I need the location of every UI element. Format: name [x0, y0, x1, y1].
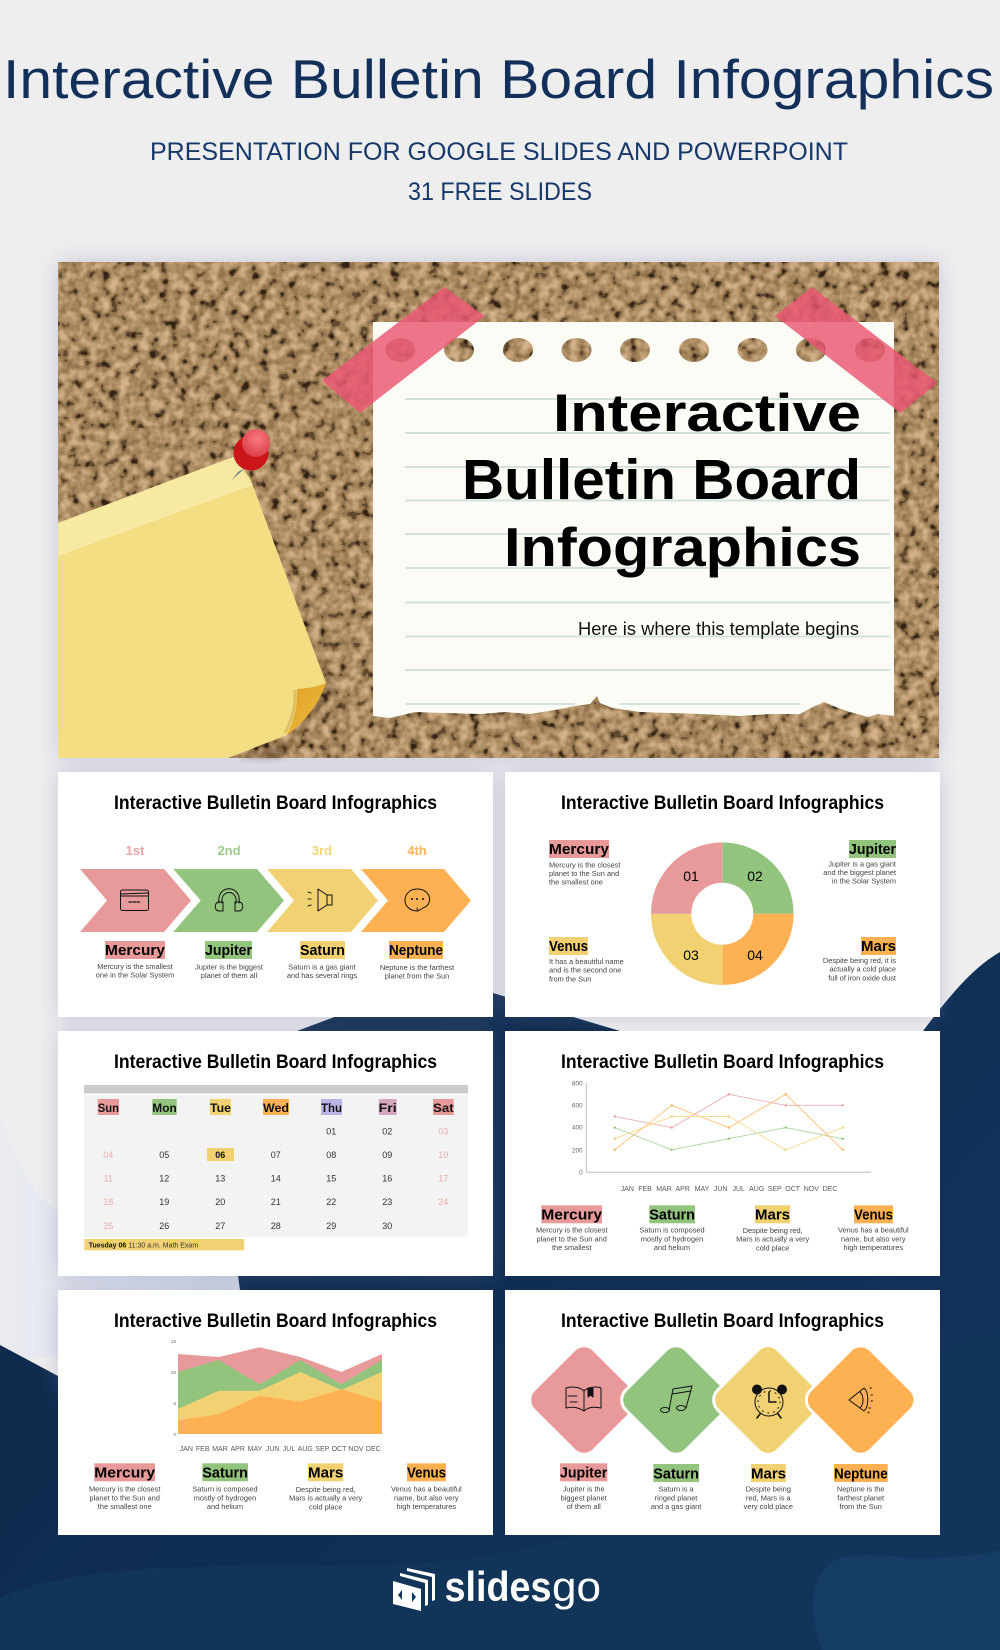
- donut chart: [651, 842, 794, 985]
- month labels: MAY: [248, 1446, 263, 1453]
- descriptions: of them all: [567, 1502, 601, 1511]
- month labels: SEP: [768, 1186, 782, 1193]
- y axis labels: 10: [171, 1370, 176, 1375]
- descriptions: and a gas giant: [651, 1502, 701, 1511]
- background: navy wave: [0, 952, 1000, 1650]
- panel: area chart slide: [58, 1290, 493, 1535]
- label: Jupiter: Jupiter: [205, 942, 252, 959]
- calendar: [84, 1095, 468, 1237]
- panel: rounded diamonds slide: [505, 1290, 940, 1535]
- descriptions: and has several rings: [287, 971, 357, 980]
- logo: slidesgo: [393, 1563, 601, 1611]
- descriptions: red, Mars is a: [746, 1493, 792, 1502]
- subtitle line 1: PRESENTATION FOR GOOGLE SLIDES AND POWERPOINT: [150, 138, 848, 166]
- descriptions: ringed planet: [655, 1493, 697, 1502]
- text: Mars: actually a cold place: [829, 965, 896, 974]
- label: Neptune: Neptune: [834, 1465, 888, 1482]
- dates: 17: [438, 1174, 448, 1184]
- ordinal labels: 1st: [126, 843, 145, 858]
- dates: 21: [271, 1197, 281, 1207]
- text: Venus: [549, 957, 624, 983]
- label: Saturn: Saturn: [649, 1206, 695, 1223]
- highlighted day: [207, 1148, 234, 1161]
- area chart: [171, 1339, 382, 1453]
- y axis labels: 400: [572, 1124, 583, 1132]
- dates: 04: [103, 1150, 113, 1160]
- month labels: AUG: [749, 1186, 764, 1193]
- weekday labels: Fri: [379, 1101, 397, 1115]
- text: Jupiter: in the Solar System: [832, 876, 896, 886]
- label: Venus: Venus: [854, 1206, 893, 1223]
- ordinal labels: 4th: [407, 843, 427, 858]
- dates: 18: [103, 1197, 113, 1207]
- event note: [84, 1239, 244, 1250]
- panel: line chart slide: [505, 1031, 940, 1276]
- icon: slidesgo stacked slides: [393, 1568, 435, 1611]
- dates: 12: [159, 1174, 169, 1184]
- descriptions: Mars is actually a very: [289, 1494, 363, 1503]
- ordinal labels: 3rd: [312, 843, 332, 858]
- ordinal labels: [126, 843, 427, 858]
- text: Jupiter: and the biggest planet: [823, 868, 896, 877]
- descriptions: Venus has a beautiful: [391, 1485, 462, 1494]
- background: pale blue blob: [0, 1110, 300, 1360]
- descriptions: [89, 1485, 462, 1511]
- sticky note curled corner: [287, 683, 326, 735]
- dates: 24: [438, 1197, 448, 1207]
- hero title text: Bulletin Board: [462, 448, 861, 512]
- dates: 23: [382, 1197, 392, 1207]
- descriptions: very cold place: [744, 1502, 793, 1511]
- heading: Interactive Bulletin Board Infographics: [561, 1052, 884, 1073]
- text: Mercury: the smallest one: [549, 878, 603, 887]
- dates: 28: [271, 1221, 281, 1231]
- month labels: JAN: [621, 1186, 634, 1193]
- descriptions: Mars is actually a very: [736, 1235, 810, 1244]
- descriptions: name, but also very: [841, 1234, 906, 1243]
- series markers: [614, 1093, 844, 1151]
- y axis labels: 800: [572, 1080, 583, 1088]
- descriptions: planet from the Sun: [385, 972, 449, 980]
- month labels: JUL: [283, 1446, 295, 1453]
- month labels: FEB: [638, 1186, 652, 1193]
- descriptions: [536, 1226, 909, 1252]
- descriptions: Mercury is the closest: [536, 1226, 607, 1235]
- text: Venus: It has a beautiful name: [549, 957, 624, 966]
- wordmark: slides: [444, 1563, 552, 1610]
- chevron arrows: [80, 869, 471, 932]
- text: Mars: [823, 956, 896, 982]
- dates: 07: [271, 1150, 281, 1160]
- month labels: JUN: [714, 1186, 728, 1193]
- month labels: DEC: [823, 1186, 837, 1193]
- descriptions: Neptune is the: [837, 1485, 885, 1494]
- dates: 13: [215, 1174, 225, 1184]
- icon: browser window: [120, 890, 148, 910]
- torn notebook paper with punched holes: [373, 322, 894, 718]
- y axis labels: 15: [171, 1339, 176, 1344]
- month labels: OCT: [785, 1186, 801, 1193]
- y axis labels: 600: [572, 1102, 583, 1110]
- month labels: OCT: [332, 1446, 347, 1453]
- descriptions: and helium: [654, 1243, 690, 1252]
- dates: 30: [382, 1221, 392, 1231]
- descriptions: high temperatures: [844, 1243, 903, 1252]
- curl shadow: [285, 690, 295, 733]
- descriptions: Venus has a beautiful: [838, 1226, 909, 1235]
- hero subtitle: Here is where this template begins: [578, 618, 859, 639]
- text: Mercury: [549, 860, 620, 887]
- descriptions: mostly of hydrogen: [194, 1493, 256, 1502]
- dates: 16: [382, 1174, 392, 1184]
- month labels: APR: [675, 1186, 690, 1193]
- dates: 03: [438, 1126, 448, 1136]
- notebook ruled lines: [405, 399, 890, 704]
- y axis labels: 0: [173, 1432, 176, 1437]
- descriptions: biggest planet: [561, 1493, 607, 1502]
- label: Mercury: Mercury: [105, 942, 166, 959]
- icon: megaphone: [849, 1388, 873, 1413]
- cork texture: [58, 262, 939, 758]
- descriptions: cold place: [756, 1243, 789, 1252]
- label: Venus: Venus: [549, 938, 588, 955]
- month labels: NOV: [804, 1186, 819, 1193]
- dates: 19: [159, 1197, 169, 1207]
- text: Mercury: Mercury is the closest: [549, 860, 620, 870]
- label: Neptune: Neptune: [389, 942, 443, 959]
- dates: 22: [326, 1197, 336, 1207]
- icon: speaker: [308, 889, 332, 911]
- subtitle line 2: 31 FREE SLIDES: [408, 178, 592, 206]
- month labels: JUN: [266, 1446, 280, 1453]
- descriptions: the smallest: [552, 1243, 591, 1252]
- month labels: DEC: [366, 1446, 381, 1453]
- month labels: APR: [230, 1446, 245, 1453]
- donut chart: 03: [683, 947, 699, 963]
- y axis labels: [572, 1080, 583, 1176]
- dates: 11: [104, 1174, 113, 1184]
- label: Saturn: Saturn: [300, 942, 345, 959]
- dates: 27: [215, 1221, 225, 1231]
- descriptions: Saturn is a gas giant: [288, 962, 356, 972]
- label: Jupiter: Jupiter: [849, 841, 896, 858]
- descriptions: Saturn is a: [658, 1485, 695, 1494]
- icon: speech bubble: [405, 889, 430, 911]
- heading: Interactive Bulletin Board Infographics: [114, 793, 437, 814]
- descriptions: [561, 1485, 885, 1511]
- descriptions: Jupiter is the: [563, 1485, 605, 1494]
- sticky note shadow: [240, 600, 335, 758]
- weekday labels: Sun: [98, 1101, 119, 1115]
- label: Venus: Venus: [407, 1465, 446, 1482]
- text: Jupiter: [823, 860, 896, 886]
- dates: 15: [326, 1174, 336, 1184]
- dates: 09: [382, 1150, 392, 1160]
- text: Mars: Despite being red, it is: [823, 956, 896, 965]
- dates: 01: [326, 1126, 336, 1136]
- label: Mars: Mars: [751, 1465, 786, 1482]
- hero title text: Infographics: [504, 516, 861, 578]
- month labels: MAR: [212, 1446, 228, 1453]
- panel: donut chart slide: [505, 772, 940, 1017]
- heading: Interactive Bulletin Board Infographics: [561, 793, 884, 814]
- month labels: JUL: [732, 1186, 745, 1193]
- weekday labels: Mon: [152, 1101, 177, 1115]
- weekday labels: Tue: [210, 1101, 231, 1115]
- descriptions: Saturn is composed: [192, 1485, 258, 1494]
- label: Saturn: Saturn: [202, 1465, 248, 1482]
- descriptions: planet of them all: [201, 971, 257, 980]
- icon: alarm clock: [752, 1384, 787, 1418]
- y axis labels: [171, 1339, 176, 1437]
- dates: 26: [159, 1221, 169, 1231]
- axes: [586, 1083, 871, 1172]
- main title: Interactive Bulletin Board Infographics: [3, 48, 994, 110]
- icon: music note: [660, 1386, 692, 1412]
- descriptions: name, but also very: [394, 1493, 459, 1502]
- label: Mercury: Mercury: [549, 841, 610, 858]
- icon: open book: [566, 1387, 601, 1411]
- logo: slidesgo: go: [552, 1563, 601, 1610]
- pink washi tape left: [322, 287, 485, 413]
- panel: calendar slide: [58, 1031, 493, 1276]
- text: Venus: and is the second one: [549, 966, 621, 975]
- descriptions: planet to the Sun and: [90, 1493, 160, 1502]
- text: Jupiter: Jupiter is a gas giant: [828, 860, 896, 868]
- label: Mercury: Mercury: [94, 1465, 156, 1482]
- weekday labels: Thu: [321, 1101, 342, 1115]
- month labels: [180, 1446, 381, 1453]
- month labels: SEP: [315, 1446, 330, 1453]
- yellow sticky note: [58, 457, 326, 758]
- text: Mars: full of iron oxide dust: [828, 973, 896, 982]
- descriptions: mostly of hydrogen: [641, 1234, 703, 1243]
- donut chart: 02: [747, 868, 763, 884]
- descriptions: the smallest one: [98, 1502, 152, 1511]
- donut chart: 04: [747, 947, 763, 963]
- dates: 05: [159, 1150, 169, 1160]
- heading: Interactive Bulletin Board Infographics: [114, 1311, 437, 1332]
- background: right blue blob: [813, 1550, 1000, 1650]
- dates: [103, 1126, 448, 1231]
- dates: 08: [326, 1150, 336, 1160]
- heading: Interactive Bulletin Board Infographics: [114, 1052, 437, 1073]
- descriptions: planet to the Sun and: [537, 1234, 607, 1243]
- event note: Tuesday 06 11:30 a.m. Math Exam: [89, 1242, 198, 1249]
- red push pin: [232, 429, 270, 480]
- label: Mars: Mars: [308, 1465, 343, 1482]
- text: Venus: from the Sun: [549, 974, 591, 983]
- donut chart: 01: [683, 868, 699, 884]
- hero slide: cork board title slide: [58, 262, 939, 758]
- descriptions: Despite being red,: [743, 1226, 803, 1235]
- heading: Interactive Bulletin Board Infographics: [561, 1311, 884, 1332]
- descriptions: one in the Solar System: [96, 970, 174, 980]
- hero title text: Interactive: [553, 384, 861, 443]
- month labels: MAR: [656, 1186, 672, 1193]
- dates: 25: [103, 1221, 113, 1231]
- descriptions: Mercury is the smallest: [97, 962, 173, 971]
- hero title text: [462, 384, 861, 578]
- series lines: [615, 1094, 843, 1150]
- descriptions: Despite being red,: [296, 1485, 356, 1494]
- label: Mercury: Mercury: [541, 1206, 603, 1223]
- y axis labels: 0: [579, 1170, 583, 1176]
- diamonds: [524, 1340, 921, 1460]
- weekday labels: Sat: [433, 1101, 454, 1115]
- text: Mercury: planet to the Sun and: [549, 869, 619, 878]
- month labels: [621, 1186, 837, 1193]
- panel: chevron process slide: [58, 772, 493, 1017]
- descriptions: from the Sun: [840, 1502, 882, 1511]
- descriptions: Mercury is the closest: [89, 1485, 160, 1494]
- label: Mars: Mars: [755, 1206, 790, 1223]
- descriptions: Despite being: [746, 1485, 791, 1494]
- y axis labels: 5: [173, 1401, 176, 1406]
- descriptions: and helium: [207, 1502, 243, 1511]
- dates: 02: [382, 1126, 392, 1136]
- label: Saturn: Saturn: [653, 1465, 699, 1482]
- card shadows: [58, 262, 940, 1390]
- dates: 10: [438, 1150, 448, 1160]
- weekday labels: [98, 1099, 454, 1115]
- icon: headphones: [215, 889, 243, 911]
- calendar header bar: [84, 1085, 468, 1094]
- month labels: AUG: [298, 1446, 313, 1453]
- background: lighter navy band: [0, 1330, 1000, 1650]
- dates: 29: [326, 1221, 336, 1231]
- dates: 06: [215, 1150, 225, 1160]
- month labels: MAY: [695, 1186, 710, 1193]
- ordinal labels: 2nd: [217, 843, 241, 858]
- y axis labels: 200: [572, 1148, 583, 1154]
- month labels: FEB: [196, 1446, 210, 1453]
- descriptions: cold place: [309, 1502, 342, 1511]
- line chart: [572, 1080, 871, 1193]
- label: Jupiter: Jupiter: [560, 1465, 607, 1482]
- descriptions: [96, 962, 454, 980]
- descriptions: Jupiter is the biggest: [195, 962, 263, 972]
- month labels: JAN: [180, 1446, 193, 1453]
- month labels: NOV: [348, 1446, 364, 1453]
- weekday labels: Wed: [263, 1101, 289, 1115]
- descriptions: farthest planet: [837, 1493, 884, 1502]
- dates: 14: [271, 1174, 281, 1184]
- dates: 20: [215, 1197, 225, 1207]
- sticky note light band: [58, 457, 253, 556]
- descriptions: Neptune is the farthest: [380, 963, 454, 972]
- descriptions: high temperatures: [397, 1502, 456, 1511]
- label: Mars: Mars: [861, 938, 896, 955]
- pink washi tape right: [775, 287, 938, 413]
- descriptions: Saturn is composed: [639, 1226, 705, 1235]
